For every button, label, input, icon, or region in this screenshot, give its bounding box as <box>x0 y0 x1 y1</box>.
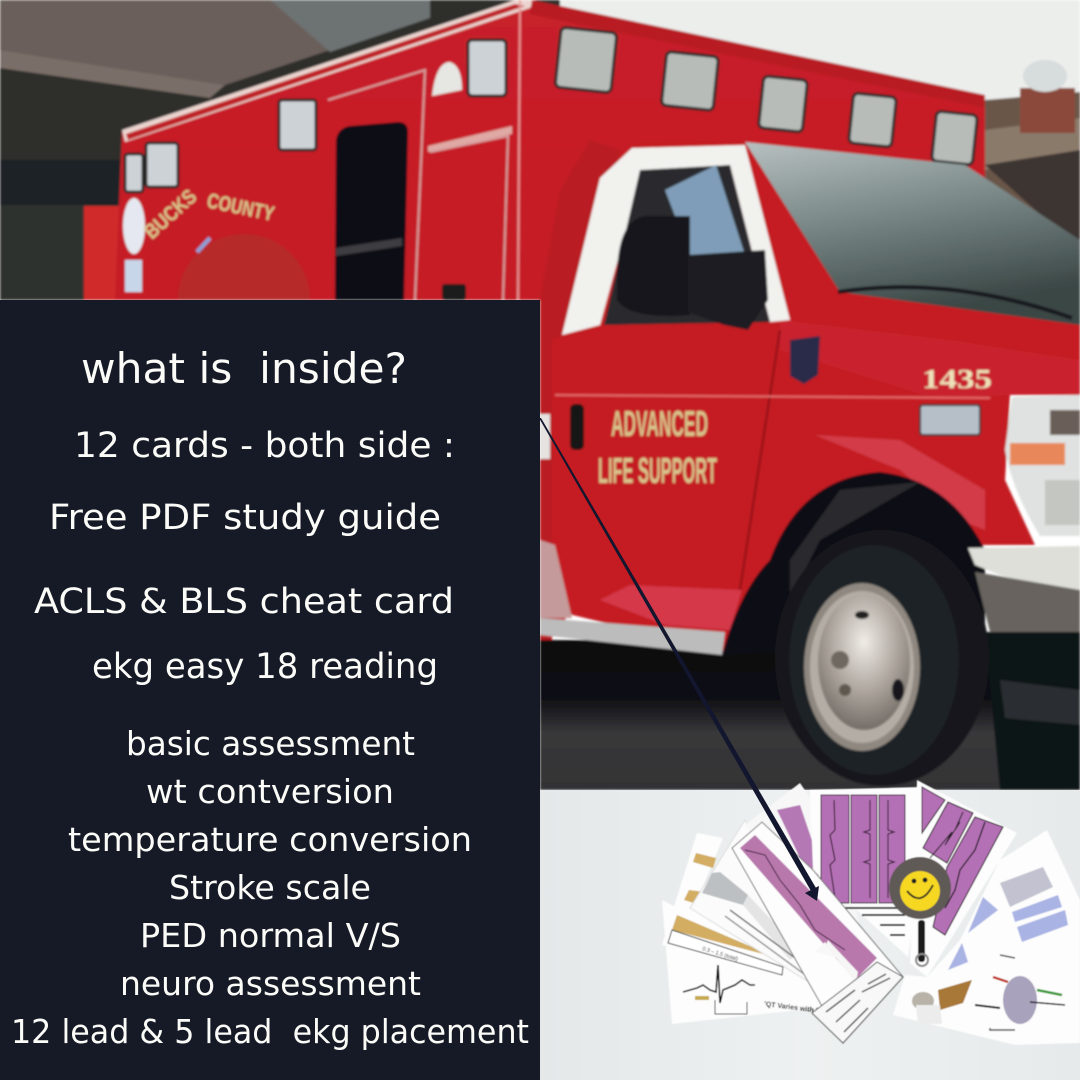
list of topics: wt contversion <box>146 772 394 811</box>
wheel arch <box>722 472 985 655</box>
card: EKG waveform: 'QT Varies with HR, <1/2 in <box>764 1001 852 1019</box>
diamond plate steps <box>600 585 742 630</box>
road <box>540 640 1080 790</box>
unit number: 1435 <box>922 364 992 394</box>
panel background <box>0 300 540 1080</box>
door seam <box>740 330 780 590</box>
rear door outline and window <box>328 70 425 300</box>
card: EKG waveform <box>662 900 852 1024</box>
card: lab values table: 0.3 – 1.5 (total) <box>701 946 739 963</box>
badge reel clip <box>912 920 942 1024</box>
building right <box>985 60 1080 250</box>
building left <box>0 0 560 300</box>
ambulance box body <box>115 0 985 640</box>
line: cheat card: ACLS & BLS cheat card <box>34 582 454 622</box>
wiper <box>838 287 1072 318</box>
arrow from text panel to cards <box>539 418 819 901</box>
list of topics: neuro assessment <box>120 964 421 1003</box>
card: rear purple EKG <box>745 783 870 985</box>
list of topics: Stroke scale <box>169 868 371 907</box>
front bumper <box>968 546 1080 790</box>
registration sticker <box>125 260 142 292</box>
door handle <box>570 404 584 450</box>
panel: what is inside <box>0 300 540 1080</box>
shield badge <box>790 336 820 384</box>
headlight <box>1005 395 1080 536</box>
photo: red ambulance <box>0 0 1080 790</box>
line: 12 cards: 12 cards - both side : <box>74 426 455 466</box>
lettering: Bucks County <box>140 185 276 244</box>
flash cards fan <box>662 780 1080 1045</box>
card: upright rhythm strips <box>810 787 923 957</box>
smiley badge reel <box>889 857 951 919</box>
list of topics: basic assessment <box>126 724 415 763</box>
list of topics: 12 lead & 5 lead ekg placement <box>11 1012 529 1051</box>
windshield <box>745 142 1080 325</box>
white window frame <box>562 145 790 335</box>
side window <box>604 165 770 325</box>
trim stripe <box>555 395 990 398</box>
heading: what is inside? <box>81 344 407 393</box>
photo: red ambulance: LIFE SUPPORT <box>598 450 717 491</box>
lettering: Bucks County: COUNTY <box>205 189 276 226</box>
blue mark <box>197 238 210 252</box>
sky <box>0 0 1080 300</box>
card: front purple EKG long <box>732 822 903 1043</box>
rear red box <box>84 206 124 300</box>
cab body <box>552 140 1080 652</box>
card: right tilted rhythm strips <box>910 780 1017 977</box>
star of life badge <box>123 198 145 254</box>
door lettering: ADVANCED <box>611 403 708 444</box>
card: lab values table <box>662 833 840 992</box>
box marker lights <box>125 27 977 192</box>
card: electrolytes gray table <box>690 820 835 992</box>
lettering: Bucks County: BUCKS <box>140 185 201 244</box>
bottom right white panel <box>540 790 1080 1080</box>
line: ekg: ekg easy 18 reading <box>92 647 438 687</box>
red patch circle <box>178 234 310 300</box>
door lettering <box>598 403 717 491</box>
hood highlight <box>780 320 1080 400</box>
marker lamp <box>920 405 980 435</box>
list of topics: PED normal V/S <box>140 916 401 955</box>
card: anatomy and asystole algorithm <box>893 830 1080 1045</box>
line: PDF guide: Free PDF study guide <box>49 498 441 538</box>
front wheel <box>775 530 989 786</box>
list of topics <box>11 724 529 1051</box>
dome lamp <box>432 62 462 96</box>
rear white stripe <box>540 414 550 459</box>
side compartment <box>428 126 512 300</box>
side mirror <box>617 216 768 330</box>
list of topics: temperature conversion <box>68 820 472 859</box>
